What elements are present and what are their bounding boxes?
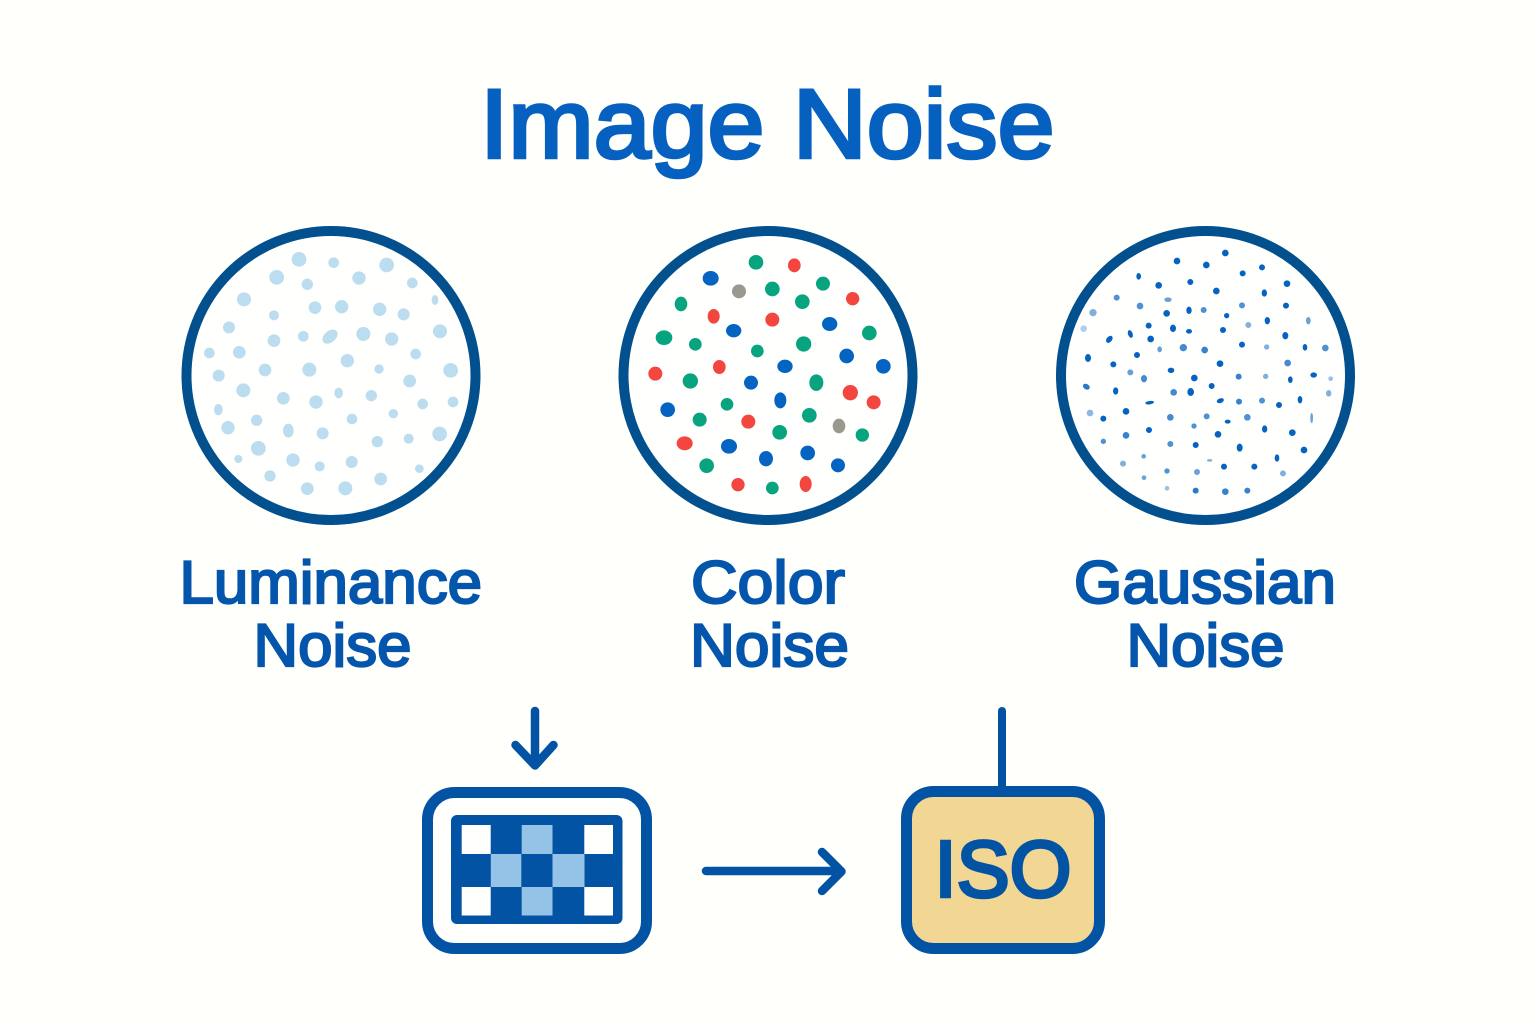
circle: color noise sample [624, 231, 912, 520]
arrow: sensor to ISO [706, 852, 842, 891]
label: color noise: Color [691, 549, 845, 616]
circle: gaussian noise sample [1061, 231, 1350, 520]
label: gaussian noise: Noise [1126, 612, 1284, 679]
arrow: down to sensor [516, 711, 554, 766]
label: luminance noise: Noise [254, 612, 412, 679]
label: gaussian noise: Gaussian [1074, 549, 1336, 616]
icon: sensor grid [428, 792, 646, 948]
label: luminance noise: Luminance [180, 549, 482, 616]
title: Image Noise [480, 70, 1054, 178]
panel: color noise [624, 231, 912, 679]
panel: luminance noise [180, 231, 482, 679]
label: color noise: Noise [690, 612, 849, 679]
icon: ISO box [906, 792, 1100, 948]
circle: luminance noise sample [186, 231, 476, 520]
ISO label: ISO [934, 824, 1072, 914]
connector line: to ISO box [998, 711, 1006, 790]
panel: gaussian noise [1061, 231, 1350, 679]
